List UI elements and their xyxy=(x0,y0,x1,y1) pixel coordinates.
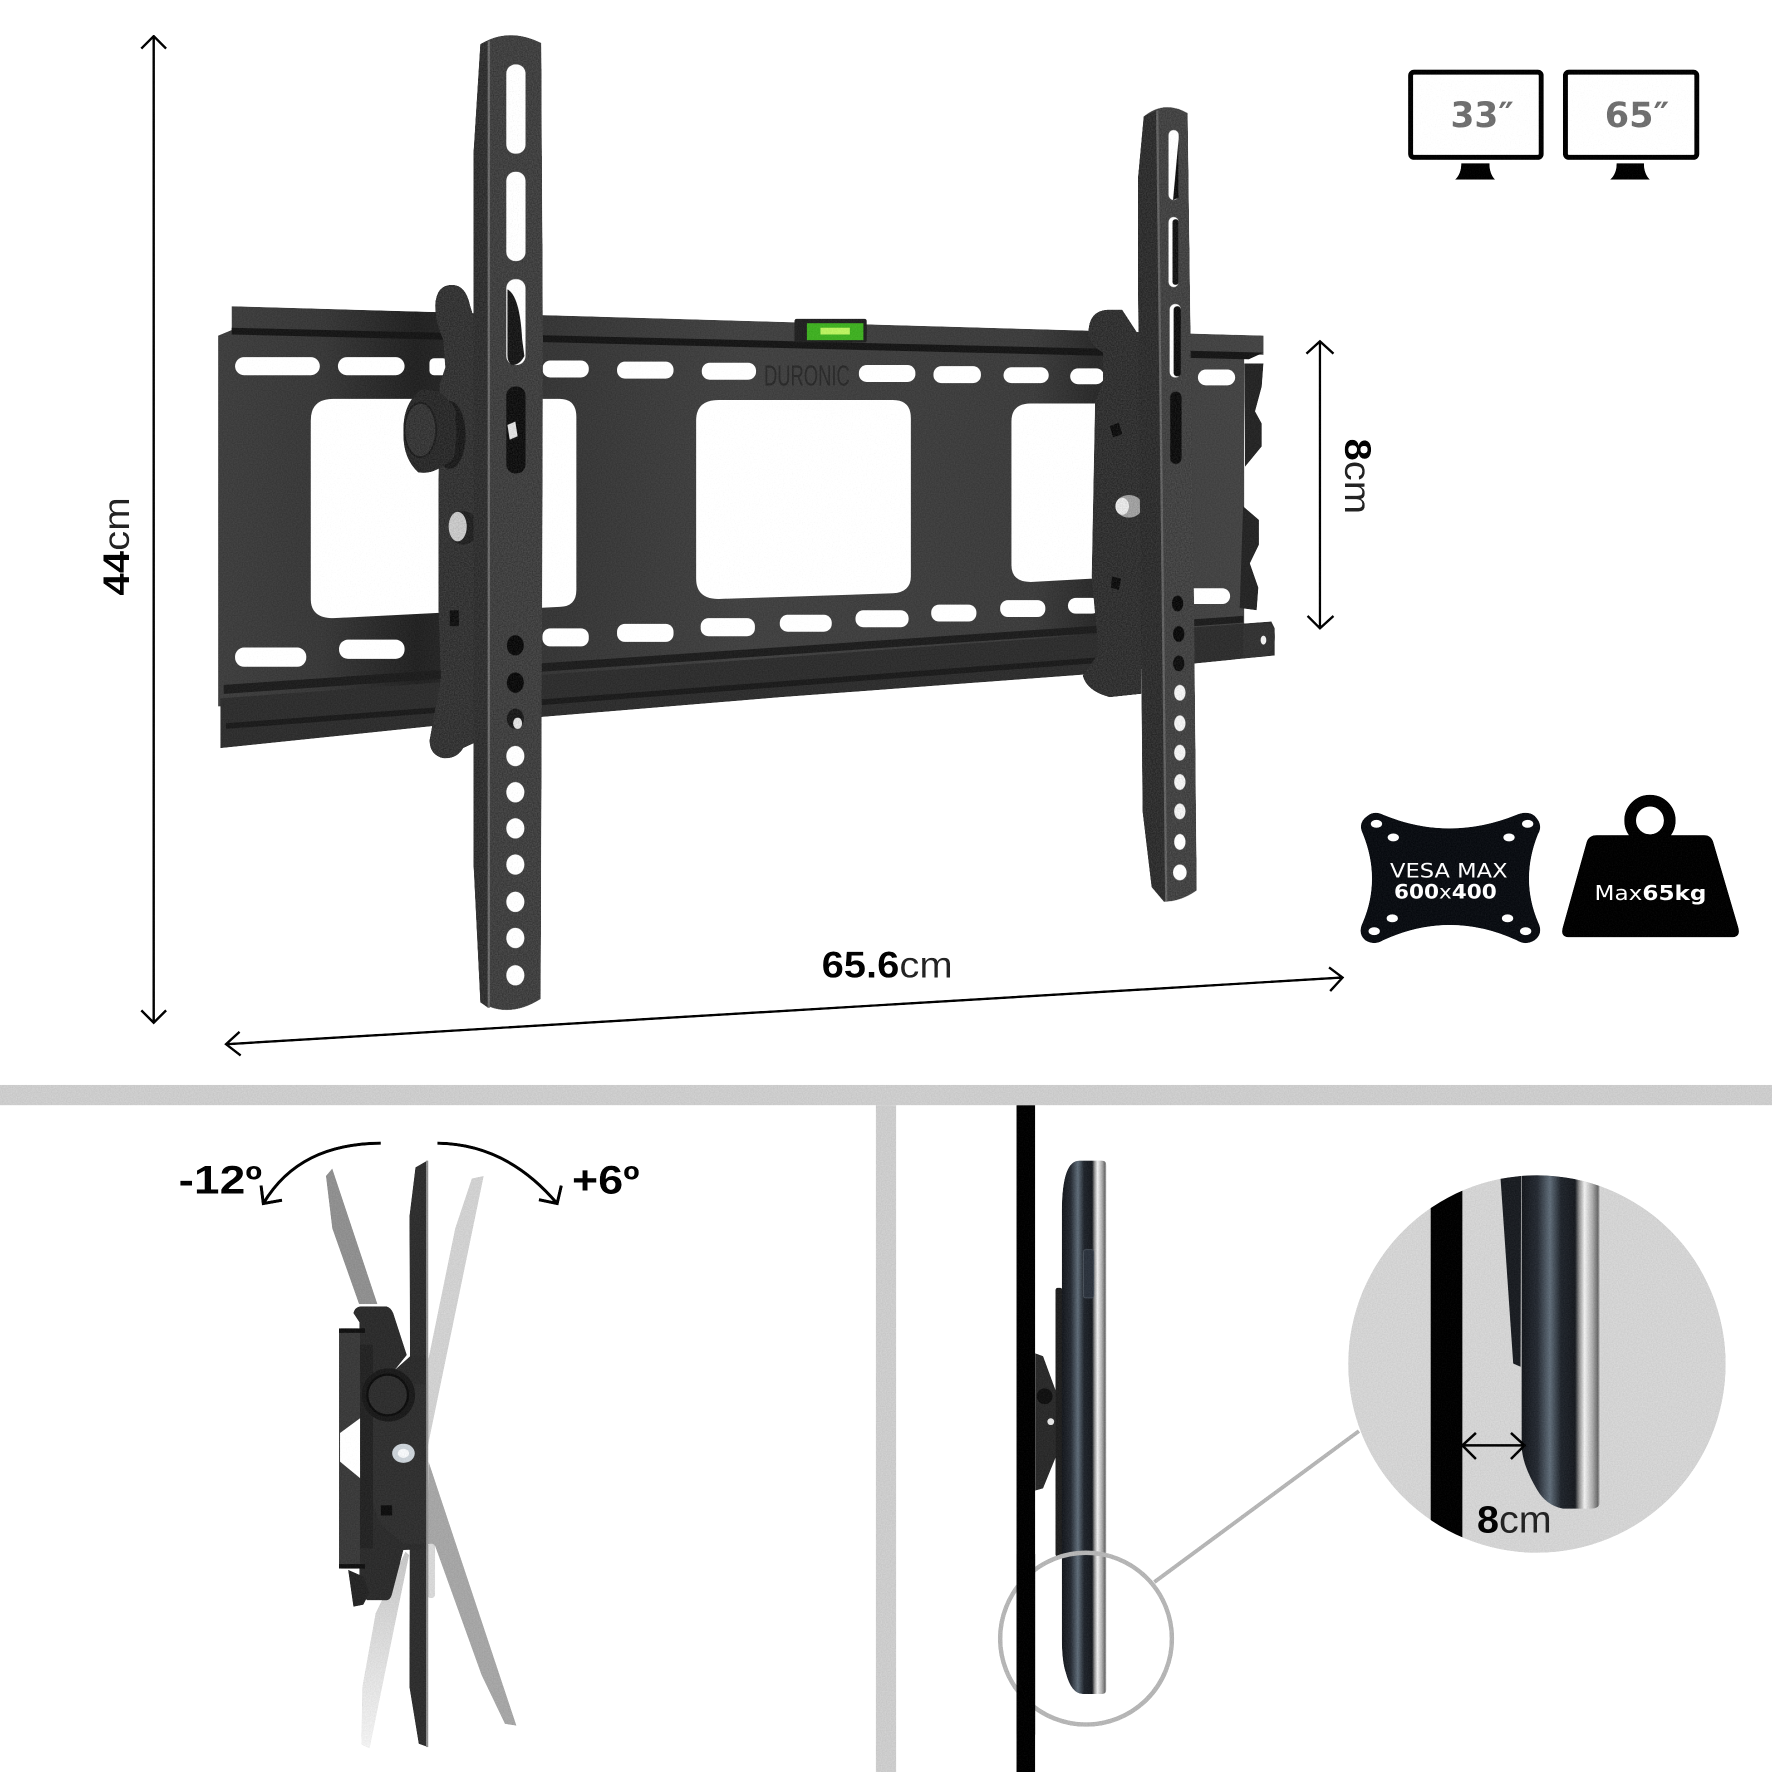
icon: VESA plate: 600 x400 xyxy=(1394,880,1497,903)
plate slots xyxy=(235,357,1235,667)
upright slots xyxy=(1169,130,1182,464)
label: 8cm: 8 cm xyxy=(1337,438,1379,514)
upright holes xyxy=(1172,596,1187,880)
label: 65.6cm: 65.6cm xyxy=(822,944,953,986)
panel: wall clearance xyxy=(1000,1105,1726,1772)
right front upright xyxy=(1138,107,1197,902)
lower knob xyxy=(348,1570,369,1607)
label: -12 degrees: -12º xyxy=(179,1158,262,1202)
left tilt arm xyxy=(403,285,480,758)
zoom detail circle xyxy=(1348,1164,1726,1553)
bolt xyxy=(449,511,478,545)
ghost: tilt up xyxy=(427,1176,516,1726)
mount side xyxy=(339,1328,360,1569)
wall plate xyxy=(218,306,1275,748)
wall over circle xyxy=(1017,1554,1035,1735)
plate windows xyxy=(311,399,1113,618)
upright slots xyxy=(506,64,525,474)
bolt xyxy=(1115,495,1143,518)
side bracket mechanism xyxy=(339,1306,426,1607)
divider: vertical xyxy=(876,1105,896,1772)
level bubble xyxy=(794,319,867,342)
zoom source circle xyxy=(1000,1553,1172,1725)
arrow: depth dimension xyxy=(1306,341,1334,628)
wall detail xyxy=(1431,1164,1462,1548)
label: 8cm: 8cm xyxy=(1477,1498,1552,1541)
arrow: width dimension xyxy=(226,967,1343,1056)
icon: weight: Max 65kg xyxy=(1595,881,1706,905)
wall xyxy=(1017,1105,1035,1772)
TV detail xyxy=(1522,1164,1600,1509)
adjustment knob xyxy=(403,390,466,473)
left front upright xyxy=(474,35,543,1010)
hex bolt xyxy=(392,1444,415,1463)
upright holes xyxy=(506,635,524,985)
icon: 33 inch monitor: 33″ xyxy=(1450,95,1514,136)
arrow: -12 degrees xyxy=(261,1143,381,1204)
icon: 65 inch monitor: 65″ xyxy=(1605,95,1669,136)
brand text on plate: DURONIC xyxy=(764,359,850,391)
upright profile xyxy=(409,1161,428,1747)
notched end pieces xyxy=(1240,363,1263,610)
TV side profile xyxy=(1062,1161,1106,1694)
panel: tilt range xyxy=(179,1143,640,1748)
label: +6 degrees: +6º xyxy=(572,1158,640,1202)
icon: 33 inch monitor xyxy=(1411,72,1541,180)
tilt knob xyxy=(362,1368,415,1422)
arrow: height dimension xyxy=(141,36,166,1023)
right tilt arm xyxy=(1083,310,1143,697)
callout line xyxy=(1154,1431,1359,1582)
bracket sliver xyxy=(1500,1175,1521,1367)
icon: VESA plate: VESA MAX xyxy=(1390,860,1508,883)
icon: 65 inch monitor xyxy=(1565,72,1697,180)
divider: horizontal xyxy=(0,1085,1772,1105)
icon: weight xyxy=(1562,801,1739,937)
label: 44cm: 44cm xyxy=(95,497,137,596)
ghost: tilt down xyxy=(326,1169,409,1748)
arrow: clearance xyxy=(1462,1433,1525,1459)
arrow: +6 degrees xyxy=(437,1143,561,1204)
tilt arm plate xyxy=(353,1306,426,1600)
icon: VESA plate xyxy=(1361,813,1540,943)
rail end ear xyxy=(1243,623,1275,658)
bracket behind TV xyxy=(1035,1288,1062,1557)
